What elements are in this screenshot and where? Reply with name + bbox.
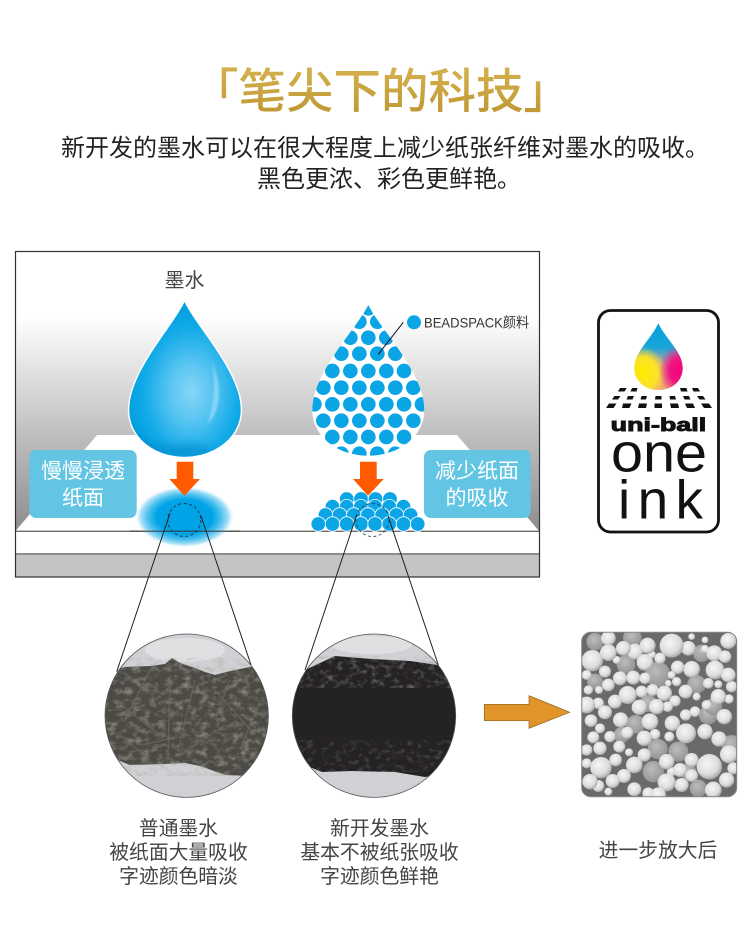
callout: reduces paper absorption: 减少纸面 <box>435 460 519 483</box>
arrow: to magnified view <box>484 696 570 728</box>
arrow: right drop to paper <box>353 462 384 496</box>
callout: slowly penetrates paper: 慢慢浸透 <box>41 460 125 483</box>
caption: new ink: 基本不被纸张吸收 <box>300 842 459 864</box>
photo: new ink <box>292 634 456 798</box>
logo: uni-ball one ink: one <box>611 422 707 484</box>
label: ink: 墨水 <box>164 269 204 292</box>
caption: ordinary ink: 普通墨水 <box>139 818 218 840</box>
callout: reduces paper absorption: 的吸收 <box>446 487 508 510</box>
icon: ink drop <box>125 298 245 460</box>
photo: ordinary ink <box>105 634 270 798</box>
logo: uni-ball one ink: ink <box>618 468 704 530</box>
caption: ordinary ink <box>109 818 248 888</box>
callout: reduces paper absorption <box>424 450 531 518</box>
icon: colour drop <box>634 323 683 390</box>
callout: slowly penetrates paper: 纸面 <box>62 487 104 510</box>
arrow: left drop to paper <box>169 462 200 496</box>
intro text <box>61 135 709 193</box>
paper bottom band <box>16 553 540 577</box>
callout: slowly penetrates paper <box>29 450 137 518</box>
bead pile on paper <box>311 492 425 536</box>
caption: new ink: 新开发墨水 <box>330 818 429 840</box>
paper surface <box>16 435 539 553</box>
caption: new ink <box>300 818 459 888</box>
caption: new ink: 字迹颜色鲜艳 <box>320 866 439 888</box>
caption: ordinary ink: 字迹颜色暗淡 <box>119 866 238 888</box>
legend: BEADSPACK pigment: BEADSPACK颜料 <box>424 314 529 330</box>
ink spread on paper <box>130 486 240 548</box>
icon: paper grid <box>606 388 712 408</box>
intro text: 新开发的墨水可以在很大程度上减少纸张纤维对墨水的吸收。 <box>61 135 709 162</box>
logo: uni-ball one ink <box>598 310 718 532</box>
intro text: 黑色更浓、彩色更鲜艳。 <box>257 166 521 193</box>
title: 「笔尖下的科技」 <box>191 66 571 119</box>
photo: magnified pigment beads <box>578 628 742 803</box>
zoom lines <box>117 513 438 672</box>
legend: BEADSPACK pigment <box>378 314 529 354</box>
logo text: uni-ball <box>611 415 706 435</box>
panel: ink diagram <box>16 252 540 577</box>
caption: after magnification: 进一步放大后 <box>599 840 717 862</box>
caption: ordinary ink: 被纸面大量吸收 <box>109 842 248 864</box>
icon: pigment bead drop <box>312 305 424 456</box>
